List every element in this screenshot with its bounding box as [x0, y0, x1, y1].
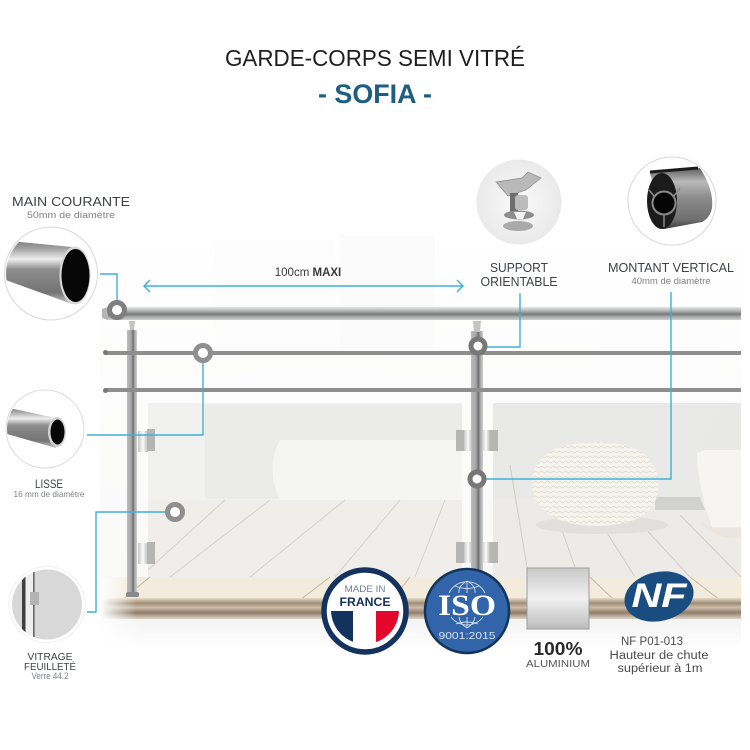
callout: montant [470, 292, 671, 486]
callout: support [471, 293, 520, 353]
background terrace scene [100, 230, 741, 577]
label: support: SUPPORT [490, 260, 548, 275]
label: vitrage: Verre 44.2 [32, 671, 68, 681]
badge: NF logo [619, 565, 699, 628]
callout: vitrage [87, 504, 182, 612]
pouf [532, 442, 668, 534]
glass clamps left post [138, 429, 155, 564]
label: NF norm: Hauteur de chute [610, 650, 708, 662]
glass panel right [493, 403, 741, 577]
icon: vitrage [9, 566, 85, 642]
glass clamps right post [456, 430, 498, 563]
badge: made in france [324, 570, 406, 652]
label: NF norm: NF P01-013 [621, 636, 683, 648]
planter [697, 405, 741, 538]
label: montant [608, 260, 734, 287]
label: 100% aluminium [526, 639, 590, 670]
label: main courante [12, 194, 130, 221]
label: main courante: 50mm de diamètre [27, 210, 115, 221]
label: support [480, 260, 558, 289]
label: support: ORIENTABLE [480, 274, 558, 289]
label: NF norm [610, 636, 708, 675]
label: NF norm: supérieur à 1m [618, 663, 702, 675]
label: 100% aluminium: ALUMINIUM [526, 658, 590, 670]
glass panel left [148, 403, 462, 577]
label: lisse [14, 477, 85, 499]
dimension label: 100cm MAXI [275, 267, 341, 279]
label: vitrage: VITRAGE [28, 651, 72, 663]
subtitle: - SOFIA - [318, 79, 432, 109]
badge: iso 9001: ISO [438, 589, 496, 622]
dimension arrow [144, 280, 463, 292]
post left [126, 321, 139, 597]
label: montant: MONTANT VERTICAL [608, 260, 734, 275]
badge: iso 9001 [425, 569, 509, 653]
badge: iso 9001: 9001:2015 [438, 630, 496, 642]
callout: lisse [87, 346, 210, 435]
rail lisse bottom [103, 388, 741, 393]
badge: NF logo: NF [632, 577, 688, 615]
label: vitrage [24, 651, 76, 681]
label: montant: 40mm de diamètre [632, 276, 710, 287]
deck edge [100, 577, 741, 649]
callout: main courante [100, 274, 124, 318]
post right [471, 321, 483, 586]
label: 100% aluminium: 100% [534, 639, 582, 659]
icon: aluminium square [527, 568, 589, 629]
label: main courante: MAIN COURANTE [12, 194, 130, 209]
handrail [102, 307, 741, 320]
icon: support orientable [475, 158, 563, 246]
icon: main courante tube [0, 227, 98, 320]
label: lisse: LISSE [35, 477, 63, 491]
label: vitrage: FEUILLETÉ [24, 660, 76, 673]
badge: made in france: MADE IN [344, 584, 386, 594]
label: lisse: 16 mm de diamètre [14, 489, 85, 499]
title: GARDE-CORPS SEMI VITRÉ [225, 45, 525, 71]
badge: made in france: FRANCE [340, 597, 391, 609]
rail lisse top [103, 350, 741, 355]
icon: montant vertical [628, 157, 716, 245]
icon: lisse tube [0, 390, 84, 468]
